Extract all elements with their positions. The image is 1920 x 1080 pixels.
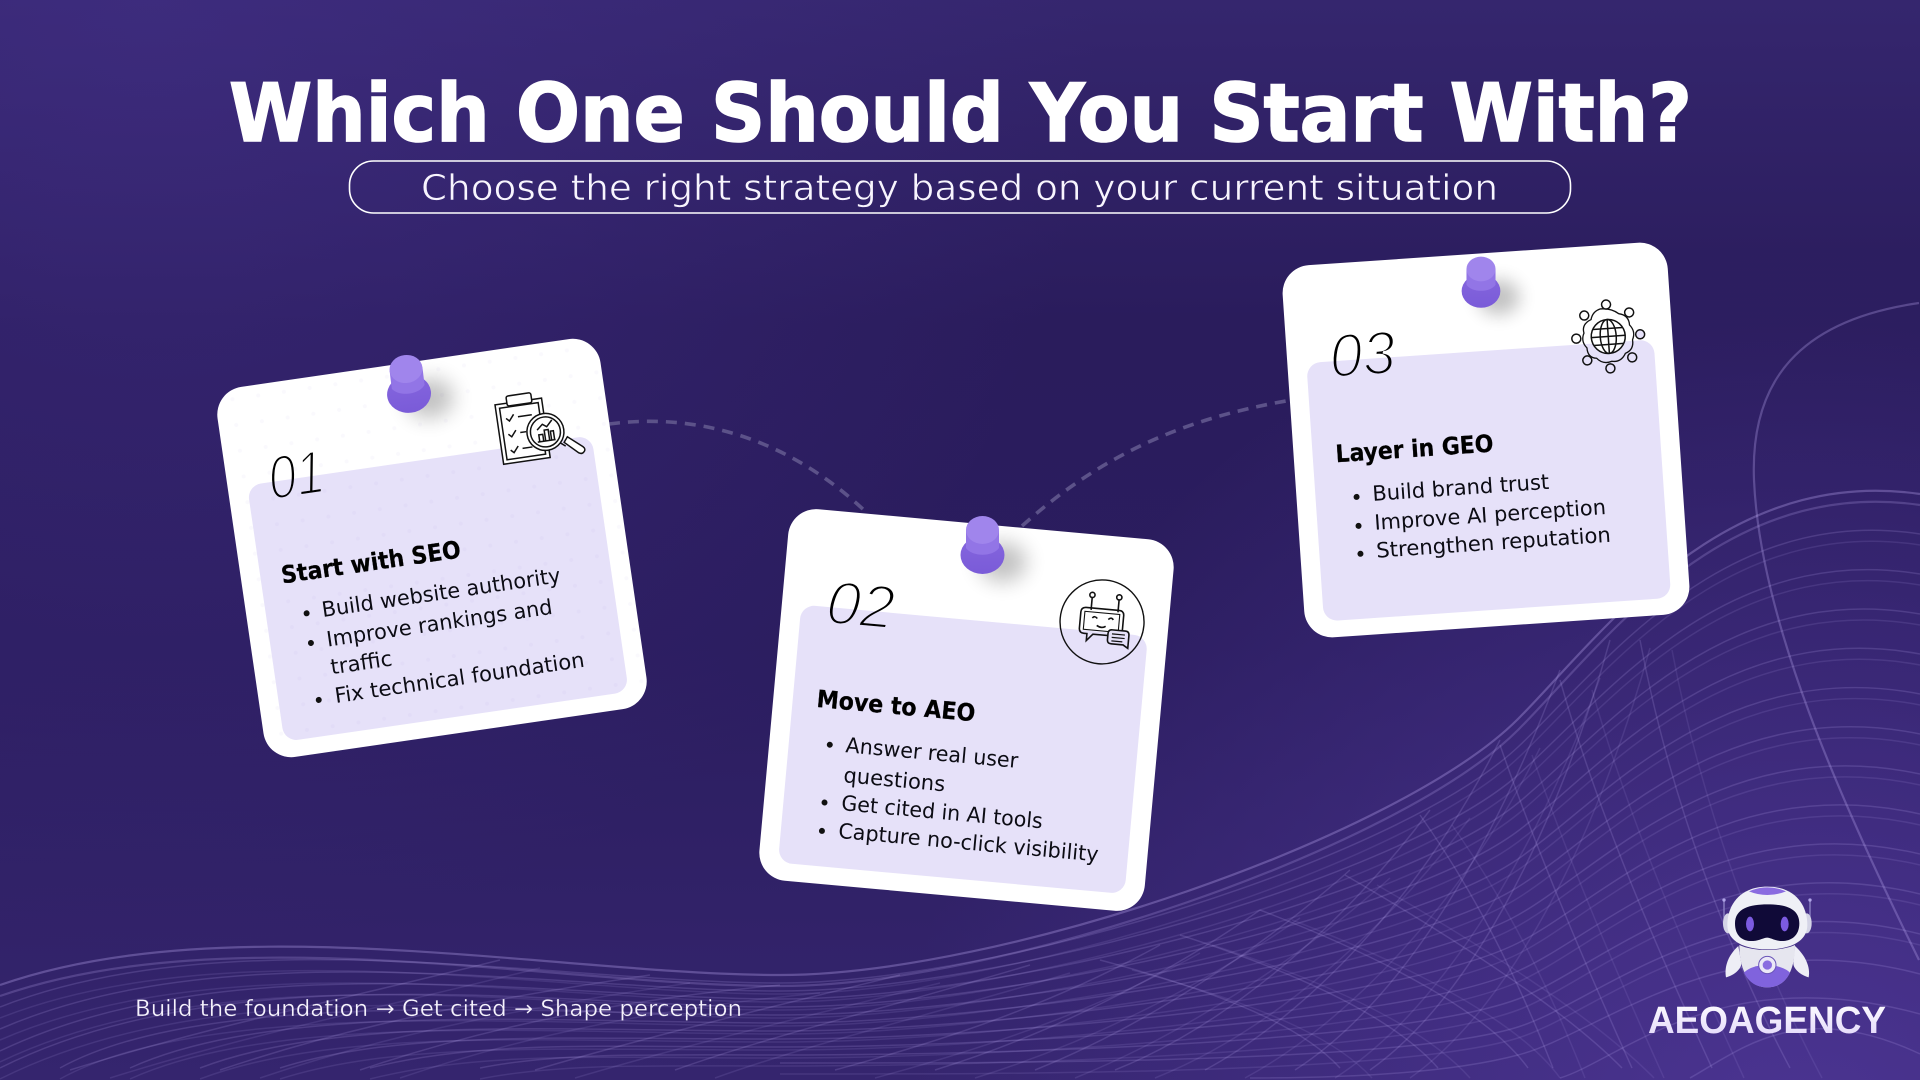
icon: pin on card 3: [1462, 257, 1520, 315]
icon: pin on card 1: [382, 350, 456, 423]
icon: pin on card 2: [960, 516, 1026, 582]
bullet list: Get cited in AI tools: [840, 791, 1044, 833]
inner lavender panel: [778, 605, 1148, 894]
icon: robot mascot logo: [1722, 887, 1812, 987]
bullet list: Strengthen reputation: [1375, 523, 1612, 563]
bullet list: [301, 562, 586, 711]
bullet list: traffic: [329, 647, 394, 679]
dashed connector: card 1 to card 2: [609, 421, 866, 512]
card background: [1281, 241, 1691, 639]
icon: globe network: [1569, 298, 1647, 375]
heading: Layer in GEO: Layer in GEO: [1335, 430, 1494, 468]
bullet list: Fix technical foundation: [333, 648, 586, 708]
bullet list: questions: [843, 763, 946, 796]
bullet list: Build website authority: [320, 563, 562, 622]
bullet list: Improve AI perception: [1374, 495, 1607, 535]
heading: Start with SEO: Start with SEO: [279, 536, 463, 589]
panel: card 1 start with SEO: [214, 335, 650, 761]
bullet list: Improve rankings and: [325, 595, 554, 652]
step number 01: 01: [263, 437, 329, 513]
step number 03: 03: [1327, 318, 1398, 390]
bullet list: [1353, 466, 1612, 564]
title: Which One Should You Start With?: [229, 67, 1692, 160]
heading: Move to AEO: Move to AEO: [816, 685, 977, 727]
inner lavender panel: [1306, 339, 1671, 621]
icon: clipboard with magnifier: [494, 386, 585, 465]
step number 02: 02: [824, 568, 898, 642]
bullet list: Answer real user: [845, 733, 1020, 773]
inner lavender panel: [247, 435, 629, 742]
icon: chatbot in circle: [1056, 576, 1148, 668]
brand name: AEOAGENCY: [1648, 1000, 1886, 1042]
panel: card 3 layer in GEO: [1281, 241, 1691, 639]
bullet list: Build brand trust: [1372, 470, 1550, 506]
footer tagline: Build the foundation → Get cited → Shape perception: [135, 997, 742, 1022]
panel: card 2 move to AEO: [757, 507, 1176, 913]
subtitle pill: [350, 161, 1570, 213]
subtitle pill: Choose the right strategy based on your current situation: [421, 168, 1498, 209]
card background: [214, 335, 650, 761]
bullet list: [818, 732, 1107, 867]
bullet list: Capture no-click visibility: [837, 819, 1100, 867]
dashed connector: card 2 to card 3: [1022, 400, 1292, 526]
card background: [757, 507, 1176, 913]
wave mesh background: [0, 303, 1920, 1079]
